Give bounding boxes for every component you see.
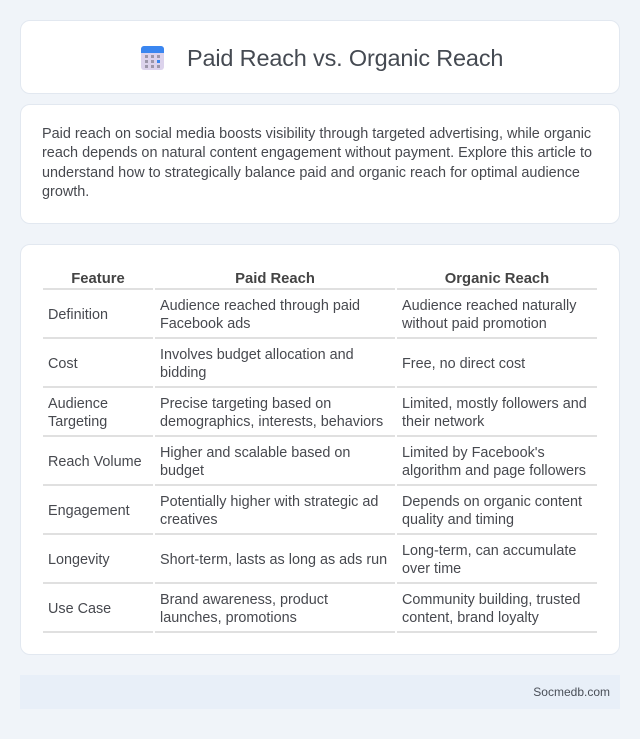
panel: introduction [20, 104, 620, 224]
table: comparison: Audience reached through paid [160, 298, 360, 314]
table: comparison: Facebook ads [160, 316, 250, 332]
text: introduction paragraph: reach depends on natural content engagement without payment. Explore this article to [42, 145, 592, 161]
table: comparison: quality and timing [402, 512, 514, 528]
table: comparison: Free, no direct cost [402, 356, 525, 372]
table: comparison: Community building, trusted [402, 592, 580, 608]
heading: title: Paid Reach vs. Organic Reach [187, 45, 503, 71]
header: Paid Reach: Paid Reach [235, 271, 315, 287]
row: Audience Targeting: Targeting [48, 414, 107, 430]
row: Definition: Definition [48, 307, 108, 323]
text: introduction paragraph [42, 126, 592, 200]
table: comparison: Long-term, can accumulate [402, 543, 576, 559]
table: comparison: bidding [160, 365, 206, 381]
row: Reach Volume: Reach Volume [48, 454, 142, 470]
row: Engagement: Engagement [48, 503, 130, 519]
row: Cost: Cost [48, 356, 78, 372]
table: comparison: Potentially higher with strategic ad [160, 494, 378, 510]
table: comparison: Higher and scalable based on [160, 445, 350, 461]
footer: source bar [20, 675, 620, 709]
panel: comparison table card [20, 244, 620, 655]
text: introduction paragraph: Paid reach on social media boosts visibility through targeted advertising, while organic [42, 126, 591, 142]
table: comparison: Precise targeting based on [160, 396, 331, 412]
panel: title card [20, 20, 620, 94]
table: comparison: Limited, mostly followers and [402, 396, 587, 412]
table: comparison: demographics, interests, behaviors [160, 414, 383, 430]
row: Audience Targeting [48, 396, 108, 430]
header: Organic Reach: Organic Reach [445, 271, 549, 287]
text: introduction paragraph: growth. [42, 184, 89, 200]
table: comparison: budget [160, 463, 204, 479]
table: comparison: without paid promotion [402, 316, 547, 332]
table: comparison: Short-term, lasts as long as ads run [160, 552, 387, 568]
table: comparison: algorithm and page followers [402, 463, 586, 479]
table: comparison: Brand awareness, product [160, 592, 328, 608]
header: Feature: Feature [71, 271, 125, 287]
icon: calendar [141, 46, 164, 70]
row: Longevity: Longevity [48, 552, 110, 568]
table: comparison: creatives [160, 512, 218, 528]
table: comparison: Limited by Facebook's [402, 445, 545, 461]
table: comparison: Audience reached naturally [402, 298, 576, 314]
table: comparison [43, 271, 597, 633]
table: comparison: Depends on organic content [402, 494, 582, 510]
row: Use Case: Use Case [48, 601, 111, 617]
table: comparison: over time [402, 561, 461, 577]
row: Audience Targeting: Audience [48, 396, 108, 412]
table: comparison: their network [402, 414, 484, 430]
table: comparison: launches, promotions [160, 610, 297, 626]
table: comparison: content, brand loyalty [402, 610, 539, 626]
text: introduction paragraph: understand how to strategically balance paid and organic reach for optimal audience [42, 165, 580, 181]
text: source: Socmedb.com [533, 685, 610, 699]
table: comparison: Involves budget allocation and [160, 347, 354, 363]
